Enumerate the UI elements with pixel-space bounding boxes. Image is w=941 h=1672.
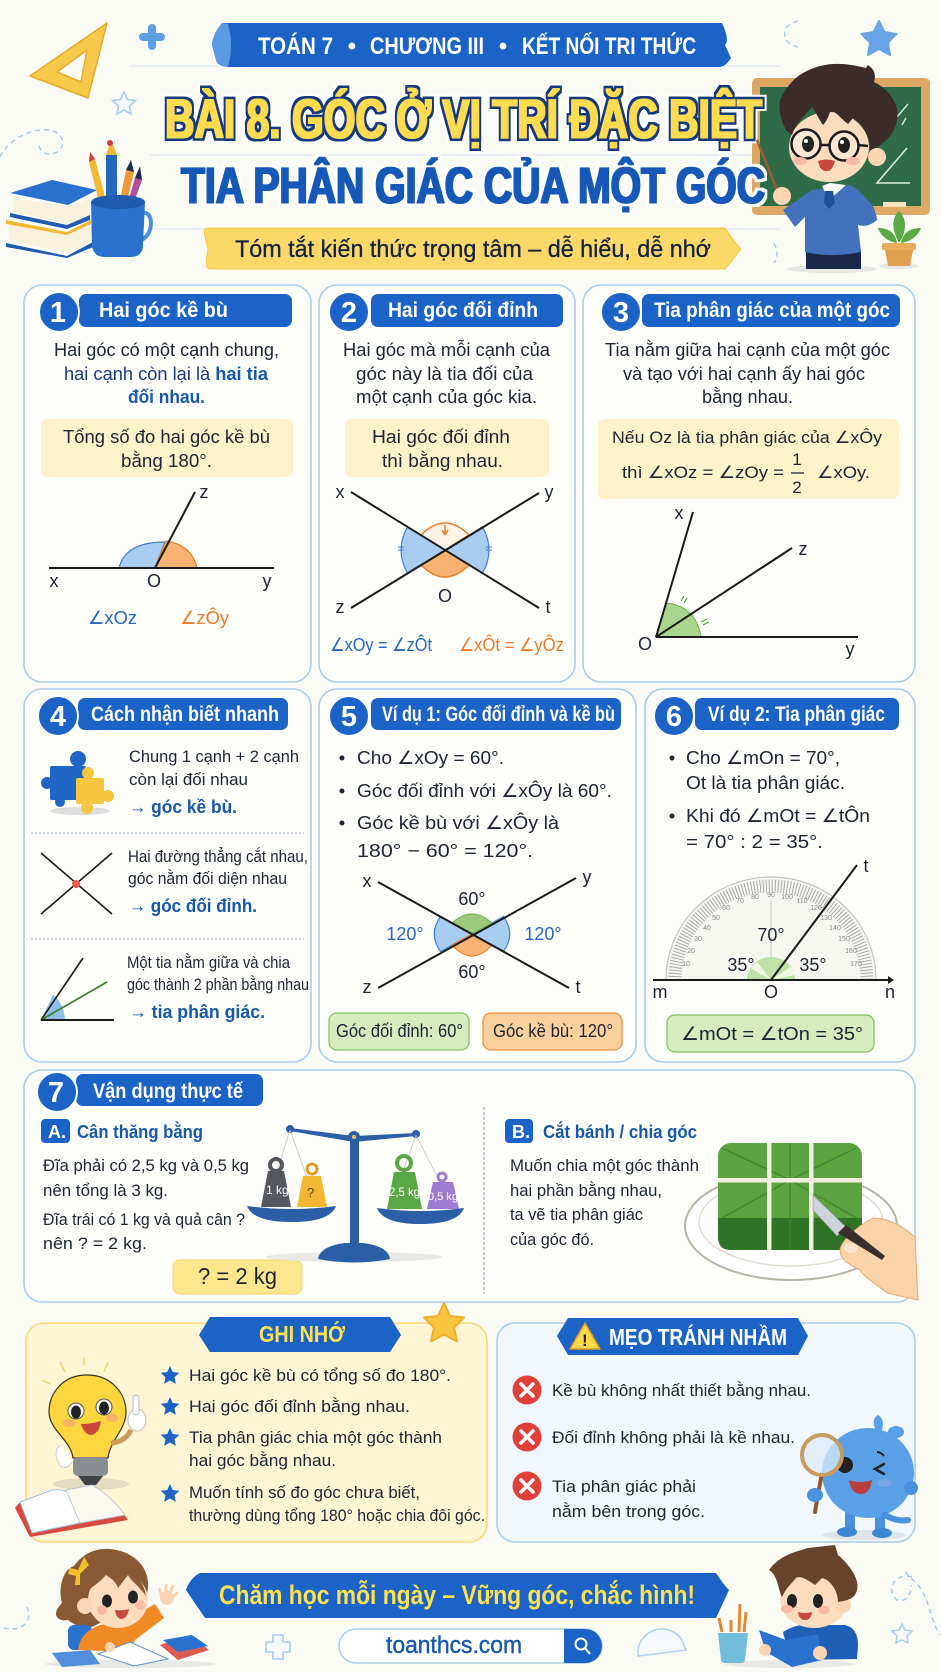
diagram: example angles: x <box>362 871 372 891</box>
icon: stacked books <box>6 180 97 258</box>
diagram: protractor: 160 <box>845 948 857 955</box>
header 4: 4 <box>50 701 66 733</box>
diagram: example angles: 120° <box>386 924 424 944</box>
diagram: protractor: 40 <box>703 925 711 932</box>
diagram: vertical angles: z <box>336 597 344 617</box>
panel 7: Vận dụng thực tế <box>24 1070 918 1302</box>
panel 4: Cách nhận biết nhanh <box>24 689 311 1062</box>
icon: balance scale: 2,5 kg <box>389 1185 420 1199</box>
diagram: angle bisector: z <box>798 539 808 559</box>
icon: light bulb mascot <box>42 1358 146 1490</box>
ghi nho ribbon: GHI NHỚ <box>259 1320 345 1347</box>
definition text: một cạnh của góc kia. <box>356 386 537 407</box>
diagram: angle bisector <box>638 503 858 659</box>
diagram: adjacent angles: x <box>50 571 58 591</box>
header 7 <box>37 1072 263 1112</box>
text A: nên ? = 2 kg. <box>43 1234 147 1253</box>
icon: balance scale: 1 kg <box>266 1183 289 1197</box>
bullet text: Góc kề bù với ∠xÔy là <box>357 812 560 833</box>
top ribbon: TOÁN 7 <box>258 32 333 60</box>
formula box: 1 <box>792 450 802 469</box>
title: TIA PHÂN GIÁC CỦA MỘT GÓC <box>181 156 765 214</box>
recognition text: bisector: góc thành 2 phần bằng nhau <box>127 975 309 994</box>
search bar <box>339 1629 602 1663</box>
icon: blue star <box>862 21 896 55</box>
title <box>165 87 765 214</box>
mistakes list: Đối đỉnh không phải là kề nhau. <box>552 1428 795 1447</box>
diagram: example angles: z <box>362 977 372 997</box>
bullet text: 180° − 60° = 120°. <box>357 840 533 861</box>
diagram: adjacent angles <box>49 482 274 628</box>
mistakes list: nằm bên trong góc. <box>552 1502 705 1521</box>
key fact box: Hai góc đối đỉnh <box>372 426 510 447</box>
panel: Mẹo tránh nhầm <box>497 1318 918 1542</box>
definition text: và tạo với hai cạnh ấy hai góc <box>623 363 865 384</box>
diagram: protractor: 70 <box>736 898 744 905</box>
definition text <box>605 339 890 407</box>
header 7: 7 <box>48 1077 64 1109</box>
icon: protractor outline <box>638 1629 686 1656</box>
top ribbon: KẾT NỐI TRI THỨC <box>522 32 696 60</box>
diagram: protractor: 10 <box>682 961 690 968</box>
header 1 <box>39 292 292 332</box>
formula box: thì ∠xOz = ∠zOy = <box>622 463 784 482</box>
header 6: 6 <box>666 701 682 733</box>
definition text: góc này là tia đối của <box>356 363 534 384</box>
diagram: vertical angles: x <box>336 482 344 502</box>
icon: open book <box>15 1485 128 1537</box>
diagram: vertical angles: ∠xÔt = ∠yÔz <box>459 634 564 655</box>
text A: Đĩa trái có 1 kg và quả cân ? <box>43 1210 245 1229</box>
definition text: Hai góc mà mỗi cạnh của <box>343 339 551 360</box>
result box: ∠mOt = ∠tOn = 35° <box>681 1023 863 1044</box>
diagram: protractor: 70° <box>757 925 785 945</box>
panel 3: Tia phân giác của một góc <box>583 285 915 682</box>
search bar: toanthcs.com <box>386 1632 522 1659</box>
remember list <box>161 1366 485 1525</box>
text B: ta vẽ tia phân giác <box>510 1205 643 1224</box>
icon: balance scale: ? <box>307 1185 314 1200</box>
diagram: example angles: y <box>582 867 592 887</box>
remember list: Hai góc đối đỉnh bằng nhau. <box>189 1397 410 1416</box>
bullet text <box>670 747 870 852</box>
formula box: ∠xOy. <box>817 463 870 482</box>
header 6 <box>654 696 899 736</box>
key fact box <box>41 419 293 477</box>
text B: của góc đó. <box>510 1230 594 1249</box>
icon: outlined plus <box>266 1635 290 1659</box>
diagram: protractor: 150 <box>838 936 850 943</box>
icon: balance scale <box>247 1125 464 1262</box>
remember list: thường dùng tổng 180° hoặc chia đôi góc. <box>189 1506 485 1525</box>
header 3: Tia phân giác của một góc <box>654 299 890 322</box>
recognition text: adjacent <box>129 747 299 817</box>
diagram: protractor: 120 <box>810 905 822 912</box>
icon: teacher boy <box>757 64 898 273</box>
subheading B: B. <box>512 1122 530 1142</box>
icon: chalkboard <box>752 78 930 215</box>
icon: balance scale: 0,5 kg <box>428 1191 458 1203</box>
panel 5: Ví dụ 1 <box>319 689 636 1062</box>
diagram: protractor: 35° <box>727 955 755 975</box>
header 7: Vận dụng thực tế <box>93 1080 243 1103</box>
bullet text: Khi đó ∠mOt = ∠tÔn <box>686 805 870 826</box>
panel 2: Hai góc đối đỉnh <box>319 285 575 682</box>
panel: Ghi nhớ <box>15 1303 487 1542</box>
remember list: Muốn tính số đo góc chưa biết, <box>189 1483 420 1502</box>
subheading A: A. <box>48 1122 66 1142</box>
key fact box <box>345 419 549 477</box>
icon: bisector angle <box>41 958 114 1020</box>
top ribbon: • <box>348 33 356 60</box>
recognition text: bisector <box>127 953 309 1022</box>
diagram: vertical angles: y <box>544 482 554 502</box>
answer box <box>173 1260 302 1294</box>
key fact box: Tổng số đo hai góc kề bù <box>63 426 270 447</box>
header 1: Hai góc kề bù <box>99 299 228 322</box>
icon: puzzle <box>41 751 114 815</box>
icon: pencil mug <box>89 140 151 257</box>
diagram: angle bisector: x <box>674 503 684 523</box>
diagram: protractor: n <box>885 982 895 1002</box>
header 2: 2 <box>341 297 357 329</box>
diagram: vertical angles <box>330 482 564 655</box>
ghi nho ribbon <box>199 1317 401 1352</box>
header 4: Cách nhận biết nhanh <box>91 703 279 726</box>
result box: green <box>329 1013 469 1050</box>
header 5 <box>329 696 621 736</box>
diagram: adjacent angles: O <box>147 571 161 591</box>
definition text <box>343 339 551 407</box>
result box: orange <box>483 1013 622 1050</box>
key fact box: bằng 180°. <box>121 450 212 471</box>
icon: outlined star <box>112 92 136 114</box>
diagram: adjacent angles: y <box>262 571 272 591</box>
header 3: 3 <box>613 297 629 329</box>
diagram: protractor: 140 <box>829 925 841 932</box>
icon: girl student <box>45 1549 215 1668</box>
recognition text: vertical: Hai đường thẳng cắt nhau, <box>128 847 308 866</box>
header 2: Hai góc đối đỉnh <box>388 299 538 322</box>
diagram: protractor: 130 <box>820 915 832 922</box>
diagram: protractor: 35° <box>799 955 827 975</box>
diagram: example angles <box>362 867 592 997</box>
header 4 <box>38 696 288 736</box>
recognition text: bisector: Một tia nằm giữa và chia <box>127 953 290 972</box>
text B: Muốn chia một góc thành <box>510 1156 699 1175</box>
definition text: Hai góc có một cạnh chung, <box>54 339 279 360</box>
top ribbon: CHƯƠNG III <box>370 33 484 60</box>
subtitle ribbon <box>204 228 741 269</box>
diagram: protractor: m <box>652 982 668 1002</box>
diagram: protractor: 30 <box>694 936 702 943</box>
formula box: Nếu Oz là tia phân giác của ∠xÔy <box>612 428 883 447</box>
remember list: Hai góc kề bù có tổng số đo 180°. <box>189 1366 451 1385</box>
definition text <box>54 339 279 407</box>
diagram: protractor: 80 <box>751 894 759 901</box>
recognition text: vertical: góc nằm đối diện nhau <box>128 869 287 888</box>
icon: potted plant <box>878 211 921 269</box>
subheading B: Cắt bánh / chia góc <box>543 1121 697 1142</box>
key fact box: thì bằng nhau. <box>382 450 503 471</box>
diagram: adjacent angles: z <box>200 482 208 502</box>
result box: green: Góc đối đỉnh: 60° <box>336 1021 463 1041</box>
remember list: Tia phân giác chia một góc thành <box>189 1428 442 1447</box>
recognition text: bisector: → tia phân giác. <box>129 1001 265 1022</box>
diagram: example angles: 60° <box>458 962 486 982</box>
diagram: angle bisector: O <box>638 634 652 654</box>
diagram: protractor: t <box>863 856 869 876</box>
result box <box>667 1015 874 1052</box>
bullet text: Cho ∠mOn = 70°, <box>686 747 840 768</box>
recognition text: adjacent: → góc kề bù. <box>129 796 237 817</box>
bullet text: Cho ∠xOy = 60°. <box>357 747 504 768</box>
meo ribbon <box>557 1318 808 1355</box>
header 3 <box>601 292 900 332</box>
subtitle ribbon: Tóm tắt kiến thức trọng tâm – dễ hiểu, dễ nhớ <box>235 236 711 263</box>
meo ribbon: MẸO TRÁNH NHẦM <box>609 1323 787 1350</box>
text A: Đĩa phải có 2,5 kg và 0,5 kg <box>43 1156 249 1175</box>
header 5: Ví dụ 1: Góc đối đỉnh và kề bù <box>382 703 615 726</box>
header 2 <box>329 292 563 332</box>
diagram: protractor: 100 <box>781 894 793 901</box>
subheading A <box>41 1119 203 1143</box>
text B <box>510 1156 699 1249</box>
mistakes list: Kề bù không nhất thiết bằng nhau. <box>552 1381 811 1400</box>
diagram: protractor: 170 <box>850 961 862 968</box>
definition text: đối nhau. <box>128 386 205 407</box>
bullet text: Góc đối đỉnh với ∠xÔy là 60°. <box>357 780 612 801</box>
text A <box>43 1156 249 1253</box>
diagram: adjacent angles: ∠zÔy <box>180 607 230 628</box>
bullet text: = 70° : 2 = 35°. <box>686 831 823 852</box>
icon: boy reading <box>718 1545 858 1668</box>
panel 1: Hai góc kề bù <box>24 285 311 682</box>
diagram: protractor <box>652 856 895 1002</box>
bullet text <box>340 747 612 861</box>
diagram: protractor: 50 <box>712 915 720 922</box>
mistakes list <box>512 1376 811 1521</box>
top ribbon: • <box>499 33 507 60</box>
diagram: protractor: O <box>764 982 778 1002</box>
diagram: protractor: 60 <box>722 905 730 912</box>
definition text: Tia nằm giữa hai cạnh của một góc <box>605 339 890 360</box>
diagram: protractor: 90 <box>767 892 775 899</box>
icon: gold star <box>424 1303 464 1342</box>
icon: yellow set square <box>30 23 107 98</box>
mistakes list: Tia phân giác phải <box>552 1477 696 1496</box>
text B: hai phần bằng nhau, <box>510 1181 662 1200</box>
formula box <box>598 419 899 499</box>
diagram: adjacent angles: ∠xOz <box>88 607 137 628</box>
panel 6: Ví dụ 2 <box>645 689 915 1062</box>
answer box: ? = 2 kg <box>198 1263 277 1289</box>
remember list: hai góc bằng nhau. <box>189 1451 336 1470</box>
definition text: hai cạnh còn lại là hai tia <box>64 363 269 384</box>
icon: crossing lines <box>41 853 112 914</box>
icon: outlined star right <box>892 1624 912 1643</box>
definition text: bằng nhau. <box>702 386 793 407</box>
icon: blue plus <box>143 28 161 46</box>
diagram: vertical angles: t <box>545 597 551 617</box>
diagram: protractor: 20 <box>687 948 695 955</box>
recognition text: adjacent: Chung 1 cạnh + 2 cạnh <box>129 747 299 766</box>
subheading A: Cân thăng bằng <box>77 1121 203 1142</box>
text A: nên tổng là 3 kg. <box>43 1181 168 1200</box>
result box: orange: Góc kề bù: 120° <box>493 1021 613 1041</box>
footer banner: Chăm học mỗi ngày – Vững góc, chắc hình! <box>219 1579 695 1610</box>
icon: blue mascot with magnifier <box>802 1415 918 1540</box>
diagram: vertical angles: ∠xOy = ∠zÔt <box>330 634 432 655</box>
diagram: angle bisector: y <box>846 639 854 659</box>
recognition text: adjacent: còn lại đối nhau <box>129 770 248 789</box>
diagram: example angles: t <box>575 977 581 997</box>
recognition text: vertical: → góc đối đỉnh. <box>129 895 257 916</box>
subheading B <box>505 1119 697 1143</box>
bullet text: Ot là tia phân giác. <box>686 772 845 793</box>
diagram: protractor: 110 <box>796 898 808 905</box>
header 6: Ví dụ 2: Tia phân giác <box>708 703 885 726</box>
diagram: example angles: 120° <box>524 924 562 944</box>
icon: cake on plate with knife and hand <box>685 1143 918 1300</box>
recognition text: vertical <box>128 847 308 916</box>
meo ribbon: ! <box>582 1331 588 1350</box>
header 5: 5 <box>341 701 357 733</box>
formula box: 2 <box>792 478 802 497</box>
top ribbon <box>212 23 731 67</box>
footer banner <box>186 1573 729 1618</box>
diagram: example angles: 60° <box>458 889 486 909</box>
header 1: 1 <box>50 297 66 329</box>
diagram: vertical angles: O <box>438 586 452 606</box>
